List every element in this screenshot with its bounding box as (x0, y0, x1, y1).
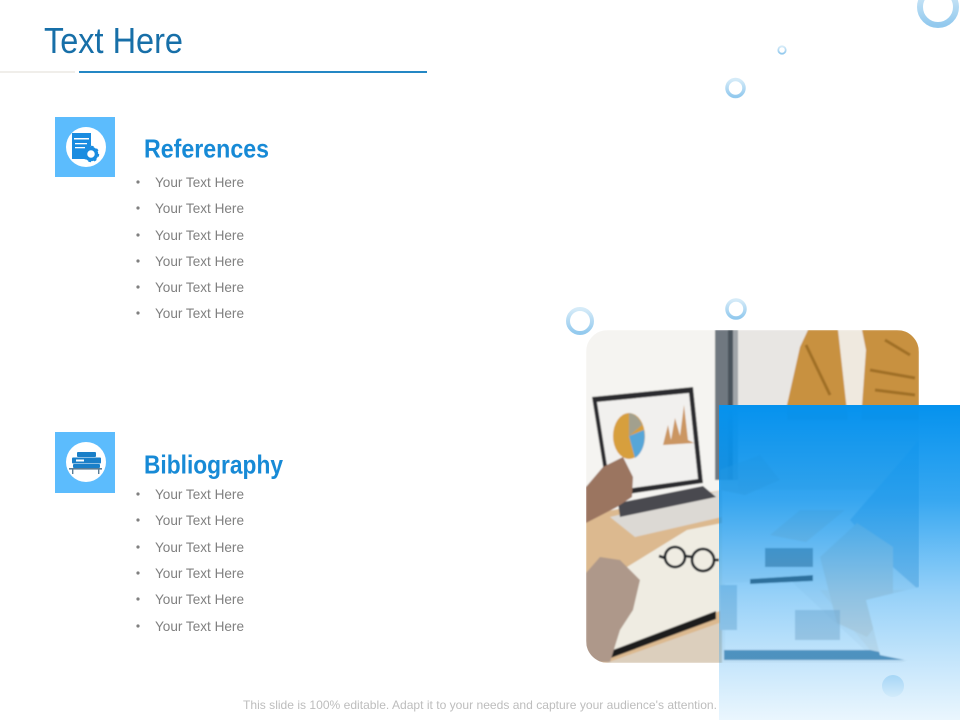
photo: business meeting with laptop (586, 330, 919, 663)
heading: bibliography: Bibliography (144, 450, 283, 480)
decorative ring: top right (920, 0, 956, 25)
decorative ring: above photo (727, 300, 745, 318)
title underline (0, 71, 427, 73)
list: bibliography: Your Text Here (155, 486, 244, 502)
panel: bibliography (55, 432, 283, 634)
title: Text Here (44, 20, 183, 61)
list: references: Your Text Here (155, 305, 244, 321)
icon: stack of books on table (55, 432, 115, 493)
decorative ring: small (778, 46, 786, 54)
list: references: Your Text Here (155, 279, 244, 295)
heading: references: References (144, 134, 269, 164)
panel: references (55, 117, 269, 321)
list: bibliography: Your Text Here (155, 618, 244, 634)
list: references: Your Text Here (155, 253, 244, 269)
decorative ring: left of photo (568, 309, 592, 333)
list: references: Your Text Here (155, 227, 244, 243)
list: references (136, 174, 244, 321)
list: bibliography: Your Text Here (155, 512, 244, 528)
list: bibliography: Your Text Here (155, 539, 244, 555)
list: bibliography: Your Text Here (155, 591, 244, 607)
list: bibliography (136, 486, 244, 634)
list: references: Your Text Here (155, 200, 244, 216)
decorative ring: medium (727, 80, 744, 96)
icon: document with gear (55, 117, 115, 177)
list: references: Your Text Here (155, 174, 244, 190)
list: bibliography: Your Text Here (155, 565, 244, 581)
footer note: This slide is 100% editable. Adapt it to your needs and capture your audience's attention. (243, 698, 717, 712)
blue gradient panel (719, 405, 960, 720)
decorative dot: bottom right (882, 675, 904, 697)
